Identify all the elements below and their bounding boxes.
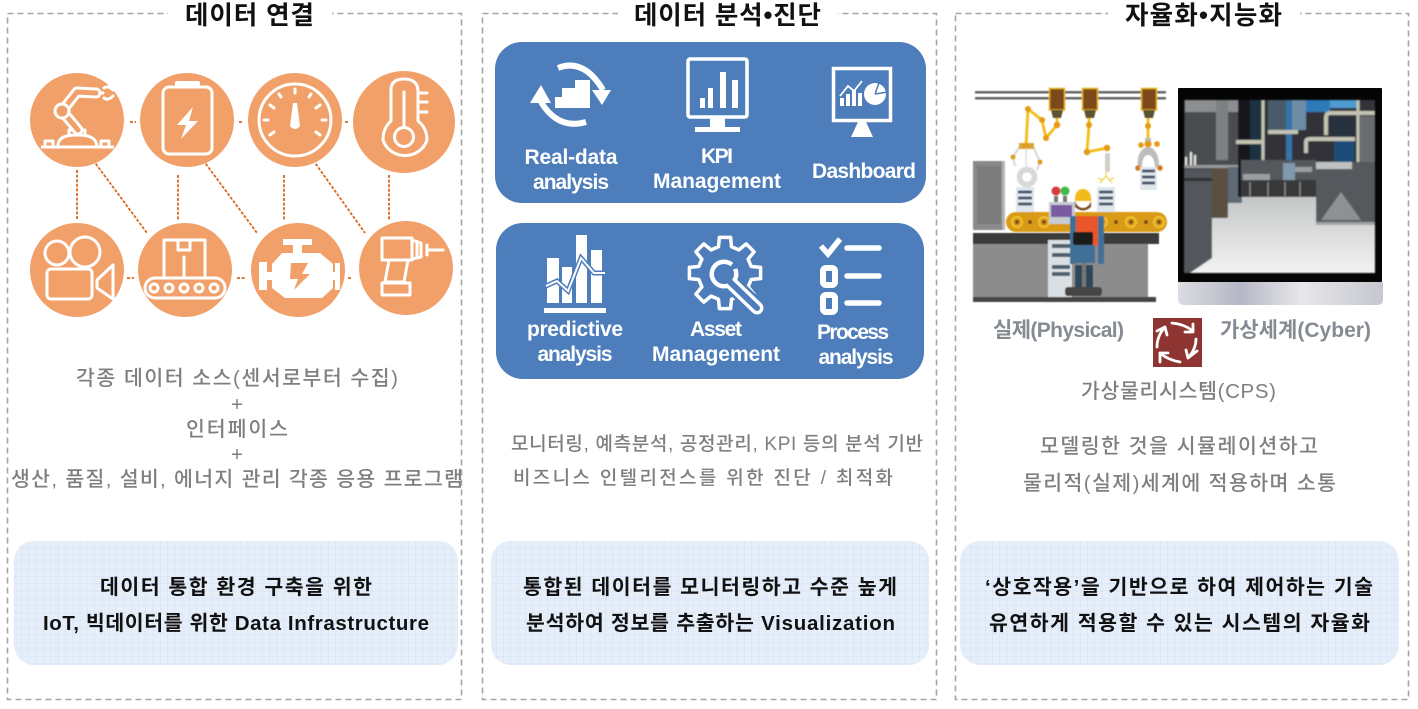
text block: data sources: 생산, 품질, 설비, 에너지 관리 각종 응용 프로그램 [11, 468, 463, 491]
text block: data sources [11, 367, 463, 491]
panel: autonomy and intelligence [956, 0, 1408, 700]
label: real-data analysis: Real-data [524, 146, 618, 169]
text block: data sources: + [231, 393, 243, 416]
icon: real-data cycle [530, 66, 611, 124]
text block: analysis description: 비즈니스 인텔리전스를 위한 진단 / 최적화 [513, 467, 893, 489]
callout: data infrastructure [14, 541, 458, 665]
callout: data infrastructure: IoT, 빅데이터를 위한 Data Infrastructure [43, 612, 429, 635]
icon: robot arm [30, 73, 124, 167]
icon: KPI monitor [688, 59, 747, 132]
icon: thermometer [353, 71, 455, 173]
label: KPI: KPI [701, 145, 733, 168]
icon: movie camera [30, 223, 124, 317]
heading: data analysis: 데이터 분석•진단 [634, 2, 821, 30]
icon: predictive chart [544, 235, 606, 313]
callout: visualization: 분석하여 정보를 추출하는 Visualization [526, 612, 895, 635]
text block: data sources: 각종 데이터 소스(센서로부터 수집) [76, 367, 398, 390]
illustration: cyber monitor [1178, 88, 1383, 305]
label: cyber: 가상세계(Cyber) [1220, 319, 1371, 342]
panel: data analysis and diagnosis [482, 0, 936, 700]
icon: engine [251, 223, 345, 317]
text block: analysis description [511, 433, 923, 489]
label: real-data analysis second line: analysis [533, 171, 609, 194]
label: CPS: 가상물리시스템(CPS) [1081, 380, 1276, 403]
icon: conveyor box [138, 223, 232, 317]
heading: data connection: 데이터 연결 [185, 2, 314, 30]
label: Management: Management [652, 343, 780, 366]
text block: CPS description [1023, 435, 1336, 495]
text block: data sources: 인터페이스 [186, 418, 288, 441]
icon: exchange arrows [1153, 318, 1202, 367]
text block: data sources: + [231, 443, 243, 466]
label: Management: Management [653, 170, 781, 193]
callout: interaction autonomy: 유연하게 적용할 수 있는 시스템의 자율화 [989, 612, 1370, 635]
callout: visualization [491, 541, 929, 665]
illustration: physical factory [973, 88, 1167, 302]
callout: interaction autonomy [960, 541, 1399, 665]
panel: data connection [8, 0, 463, 700]
icon: power drill [359, 221, 453, 315]
blue card: analytics top row [495, 42, 926, 203]
label: predictive: predictive [527, 318, 623, 341]
text block: analysis description: 모니터링, 예측분석, 공정관리, KPI 등의 분석 기반 [511, 433, 923, 455]
label: Dashboard: Dashboard [812, 160, 916, 183]
icon: gauge [248, 73, 342, 167]
callout: interaction autonomy: ‘상호작용’을 기반으로 하여 제어하는 기술 [985, 576, 1373, 599]
label: physical: 실제(Physical) [993, 319, 1124, 342]
callout: data infrastructure: 데이터 통합 환경 구축을 위한 [100, 576, 372, 599]
callout: visualization: 통합된 데이터를 모니터링하고 수준 높게 [523, 576, 897, 599]
dashed connector network [77, 122, 389, 278]
icon: gear and wrench [689, 237, 761, 309]
heading: autonomy: 자율화•지능화 [1125, 2, 1282, 30]
blue card: analytics bottom row [496, 223, 924, 379]
icon: battery [140, 73, 234, 167]
text block: CPS description: 물리적(실제)세계에 적용하며 소통 [1023, 472, 1336, 495]
label: Asset: Asset [690, 318, 742, 341]
text block: CPS description: 모델링한 것을 시뮬레이션하고 [1040, 435, 1318, 458]
icon: process checklist [821, 239, 879, 312]
label: analysis: analysis [818, 346, 894, 369]
icon: dashboard monitor [834, 68, 890, 137]
label: Process: Process [817, 321, 889, 344]
label: analysis: analysis [538, 343, 612, 366]
